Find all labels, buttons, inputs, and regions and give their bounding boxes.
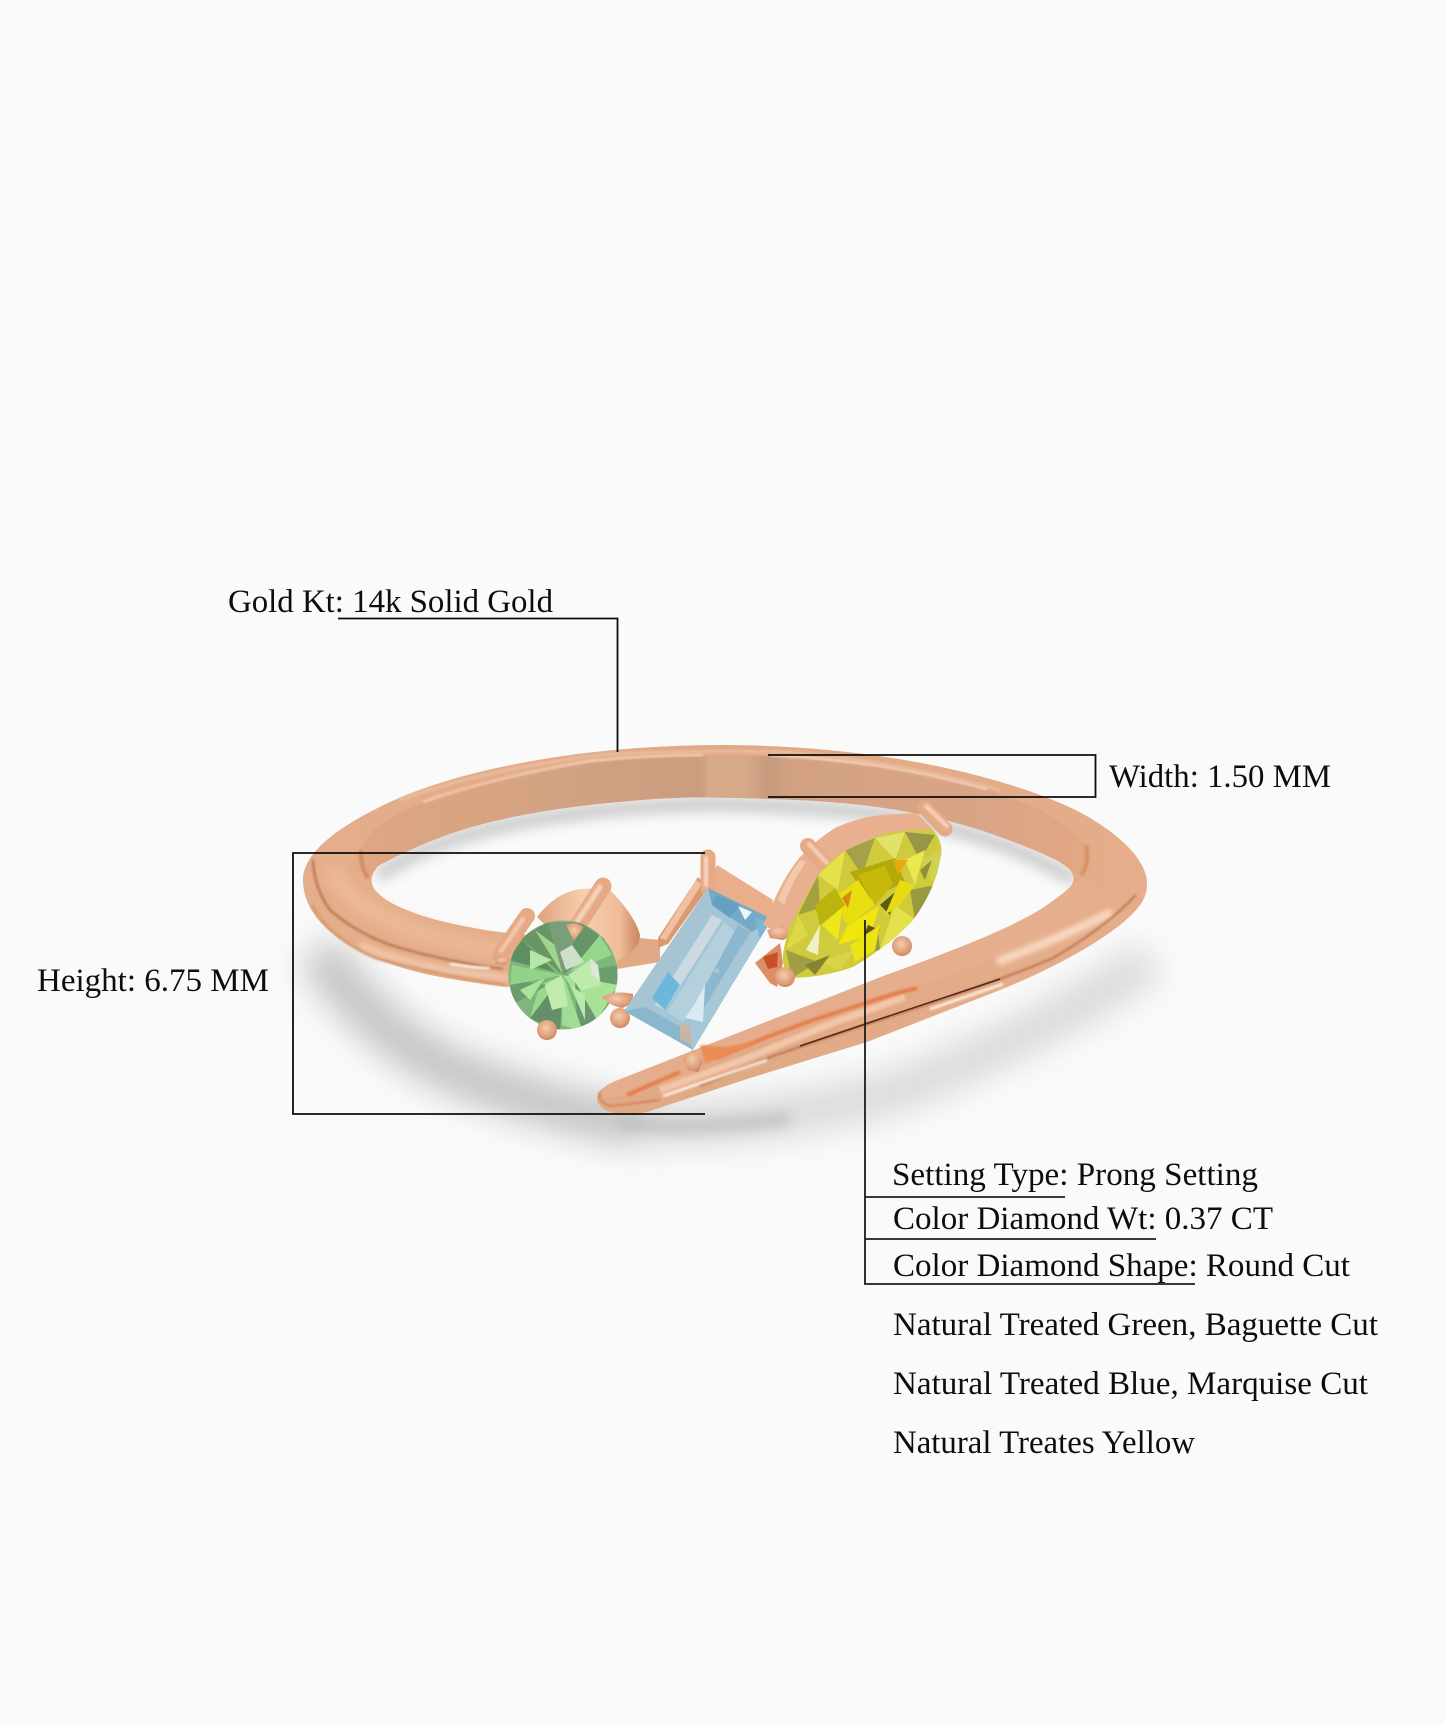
yellow upper left prong highlight <box>809 844 827 863</box>
green stone beads <box>494 923 633 1040</box>
left rounded edge highlight <box>360 945 510 978</box>
top rim highlights <box>423 755 703 802</box>
yellow top right prong <box>925 808 945 829</box>
callout: stone and setting specifications: Natural Treates Yellow <box>893 1425 1195 1461</box>
yellow upper left prong <box>808 846 826 866</box>
callout: Height <box>37 853 705 1114</box>
blue baguette stone <box>624 888 772 1050</box>
blue bottom bead <box>683 1050 703 1072</box>
tail white streak <box>663 984 1003 1096</box>
blue left strip <box>658 877 708 948</box>
bead left <box>494 956 512 965</box>
callout: stone and setting specifications <box>865 920 1378 1461</box>
white streak under left band <box>450 964 490 968</box>
bead triangle right <box>602 993 633 1008</box>
blue stone setting <box>658 857 773 948</box>
callout: Height: Height: 6.75 MM <box>37 963 269 999</box>
callout: stone and setting specifications: Natural Treated Green, Baguette Cut <box>893 1307 1378 1343</box>
green right prong highlight <box>577 887 600 922</box>
yellow underside gallery <box>755 943 783 987</box>
tip of tail <box>600 1092 660 1106</box>
yellow cup wall <box>763 813 933 937</box>
blue top prong <box>700 857 716 888</box>
inner wall orange edge on left and right <box>361 850 368 878</box>
callout: stone and setting specifications: Setting Type: Prong Setting <box>892 1157 1258 1193</box>
blue back wall <box>708 865 773 920</box>
green stone setting <box>500 886 640 970</box>
left flat face shading <box>330 868 510 952</box>
green stone <box>508 920 618 1032</box>
green left prong highlight <box>501 919 523 951</box>
product diagram: ring with specification callouts <box>38 589 1378 1454</box>
band silhouette <box>303 745 1147 1114</box>
callout: Width <box>768 755 1331 797</box>
yellow marquise stone <box>782 830 942 978</box>
ring band <box>303 745 1147 1114</box>
callout: stone and setting specifications: Color Diamond Shape: Round Cut <box>893 1248 1350 1284</box>
yellow stone beads <box>775 936 912 987</box>
tail orange reflection <box>627 988 917 1095</box>
ring cast shadow <box>318 804 1150 1126</box>
tail bright highlight near tip of band <box>997 912 1112 962</box>
yellow stone setting <box>755 806 947 987</box>
inner wall of band <box>361 756 1086 880</box>
tail orange patch under bead <box>700 1042 757 1064</box>
tail dark ridge line <box>700 895 1136 1086</box>
bead on stone top <box>566 923 584 941</box>
green cup <box>537 888 640 970</box>
yellow top right prong highlight <box>926 806 947 826</box>
callout: Width: Width: 1.50 MM <box>1109 759 1331 795</box>
callout: Gold Kt: Gold Kt: 14k Solid Gold <box>228 584 553 620</box>
callout: Gold Kt <box>228 584 618 752</box>
tail upper face <box>600 877 1110 1098</box>
green right prong <box>576 886 603 928</box>
small prong at blue stone <box>767 925 792 940</box>
bead right <box>610 1008 630 1028</box>
blue top prong highlight <box>704 858 708 885</box>
yellow cup highlight <box>778 860 806 905</box>
callout: stone and setting specifications: Color Diamond Wt: 0.37 CT <box>893 1201 1273 1237</box>
left ridge line <box>313 860 503 969</box>
callout: stone and setting specifications: Natural Treated Blue, Marquise Cut <box>893 1366 1368 1402</box>
left rounded edge shade <box>312 905 505 985</box>
bead bottom <box>537 1020 557 1040</box>
green left prong <box>500 916 527 955</box>
tail peach highlight band <box>660 997 905 1090</box>
